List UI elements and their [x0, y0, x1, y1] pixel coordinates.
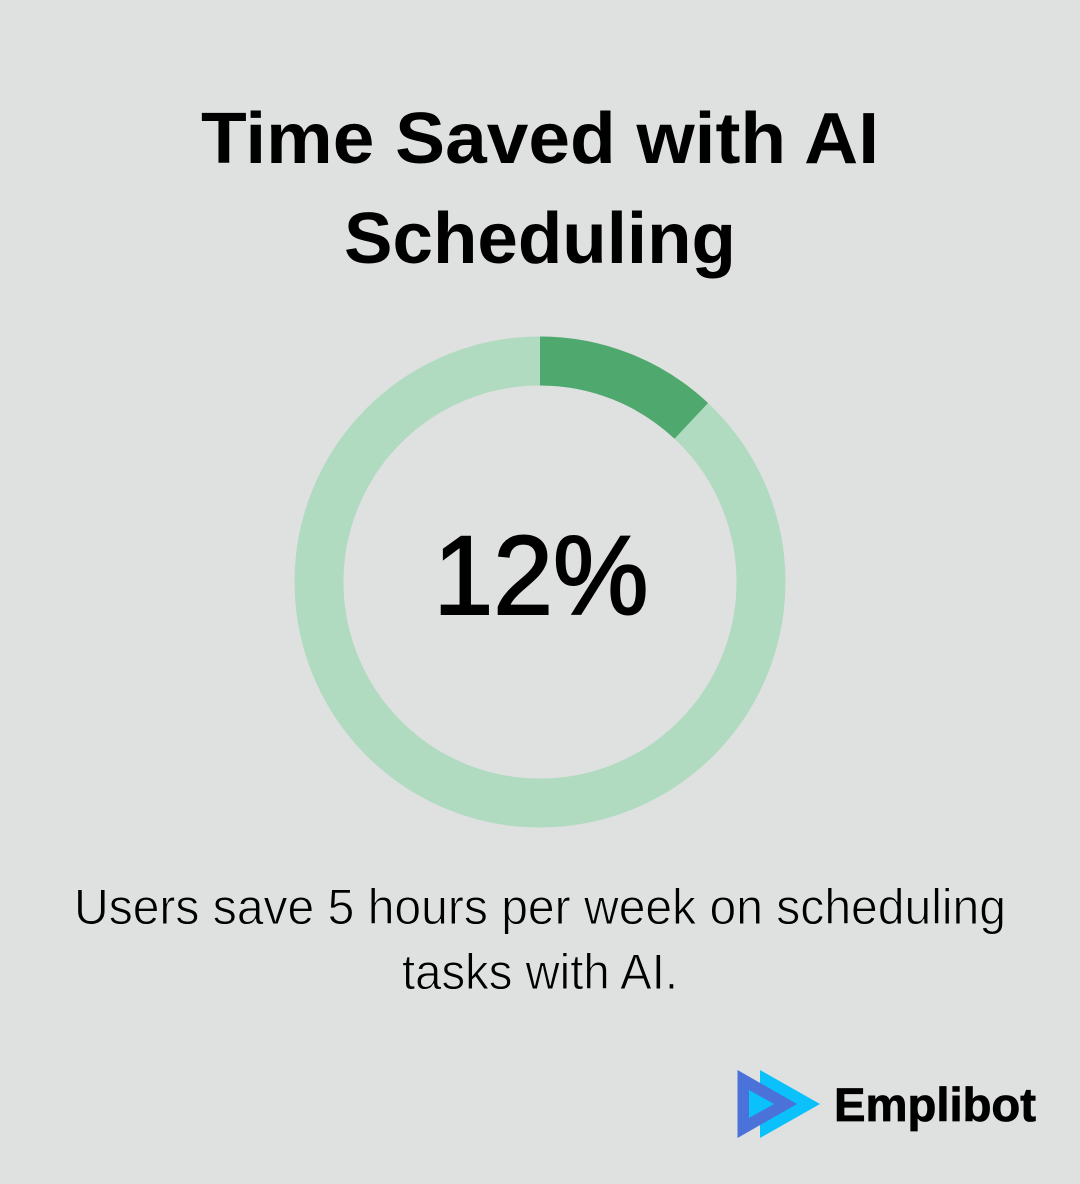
logo wordmark: Emplibot: [834, 1078, 1036, 1131]
logo: Emplibot: [738, 1070, 1036, 1138]
donut chart: 12%: [319, 361, 761, 803]
description: Users save 5 hours per week on scheduling: [74, 879, 1006, 935]
center value: 12%: [434, 513, 648, 638]
description: tasks with AI.: [402, 944, 678, 1000]
title: Scheduling: [344, 199, 736, 279]
title: Time Saved with AI: [201, 99, 879, 179]
title: [201, 99, 879, 279]
icon: play triangles: [738, 1070, 820, 1138]
description: [74, 879, 1006, 1000]
